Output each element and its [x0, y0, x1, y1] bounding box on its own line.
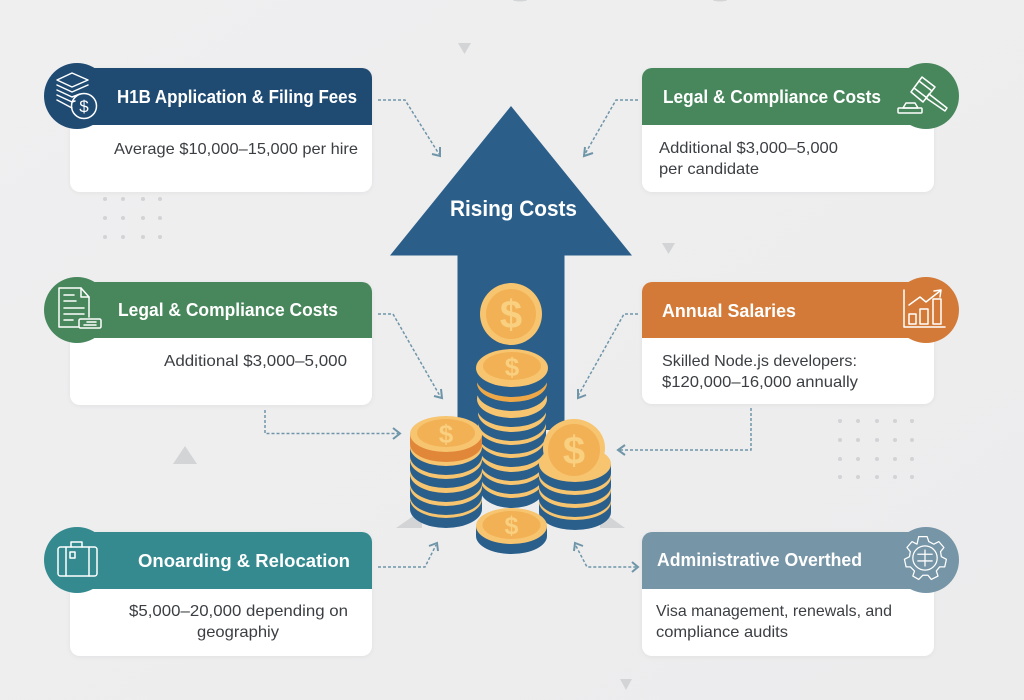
panel: legal and compliance costs (left): [44, 277, 372, 405]
panel: annual salaries: $120,000–16,000 annually: [662, 374, 858, 391]
heading: Administrative Overthed: [657, 550, 862, 570]
decorative triangle left: [173, 446, 197, 464]
body text: Additional $3,000–5,000: [164, 353, 347, 370]
icon: stacked money and dollar: $: [79, 97, 89, 116]
icon: stacked money and dollar: [57, 73, 96, 118]
decorative triangle top: [458, 43, 471, 54]
arrow label: Rising Costs: [450, 196, 577, 221]
panel: administrative overhead: compliance audits: [656, 624, 788, 641]
heading: Annual Salaries: [662, 301, 796, 321]
cropped mark at top edge right: [713, 0, 727, 2]
dot grid left: [103, 197, 162, 239]
body text: Skilled Node.js developers:: [662, 353, 857, 370]
panel: administrative overhead: [642, 527, 959, 656]
panel: onboarding and relocation: [44, 527, 372, 656]
central rising arrow: [390, 106, 632, 430]
panel: legal and compliance costs (top right): [642, 63, 959, 192]
ground shadow: [396, 510, 625, 528]
left coin stack: [410, 416, 482, 528]
connector arrow: card 2 to centre: [584, 100, 638, 156]
body text: $5,000–20,000 depending on: [129, 603, 348, 620]
decorative triangle right: [662, 243, 675, 254]
heading: H1B Application & Filing Fees: [117, 87, 357, 107]
front coin: [476, 508, 547, 554]
floating coin: $: [500, 293, 522, 337]
panel: onboarding and relocation: geographiy: [197, 624, 279, 641]
icon: suitcase: [58, 542, 97, 576]
body text: Additional $3,000–5,000: [659, 140, 838, 157]
icon: document: [59, 288, 101, 328]
connector arrow: coins to card 6: [574, 543, 638, 572]
connector arrow: card 3 lower to coins: [265, 410, 400, 439]
right coin stack: [539, 419, 611, 530]
front coin: $: [505, 512, 519, 540]
panel: legal and compliance costs (top right): per candidate: [659, 161, 759, 178]
icon: bar chart with trend: [904, 290, 945, 327]
cropped mark at top edge: [513, 0, 527, 2]
connector arrow: card 3 to centre: [378, 314, 442, 398]
heading: Legal & Compliance Costs: [118, 300, 338, 320]
connector arrow: card 1 to centre: [378, 100, 440, 156]
heading: Legal & Compliance Costs: [663, 87, 881, 107]
connector arrow: card 4 to centre: [578, 314, 638, 398]
body text: Visa management, renewals, and: [656, 603, 892, 620]
icon: gavel: [898, 77, 947, 113]
floating coin: [480, 283, 542, 345]
body text: Average $10,000–15,000 per hire: [114, 141, 358, 158]
left coin stack: $: [439, 419, 454, 449]
centre coin stack: [476, 349, 548, 508]
dot grid right: [838, 419, 914, 479]
connector arrow: card 4 lower to coins: [618, 408, 751, 455]
coins illustration: [396, 283, 625, 554]
right coin stack: $: [563, 429, 585, 473]
connector arrow: card 5 to coins: [378, 543, 438, 567]
heading: Onoarding & Relocation: [138, 551, 350, 571]
icon: gear: [904, 537, 946, 579]
panel: H1B application and filing fees: [44, 63, 372, 192]
decorative triangle bottom: [620, 679, 632, 690]
panel: annual salaries: [642, 277, 959, 404]
centre coin stack: $: [505, 352, 520, 382]
